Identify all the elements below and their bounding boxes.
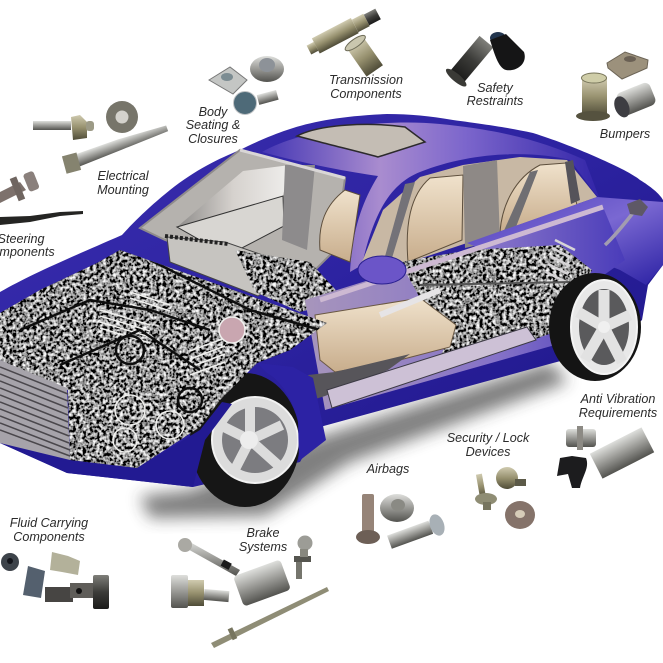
engine bay bbox=[0, 245, 330, 470]
icon: body seating fasteners bbox=[209, 56, 284, 114]
icon: safety restraint fasteners bbox=[444, 32, 525, 89]
label: Bumpers: Bumpers bbox=[600, 127, 651, 141]
front wheel bbox=[190, 373, 300, 507]
label: Electrical Mounting: Mounting bbox=[97, 183, 149, 197]
label: Electrical Mounting: Electrical bbox=[97, 169, 149, 183]
label: Body Seating and Closures: Closures bbox=[188, 132, 239, 146]
label: Body Seating and Closures: Seating & bbox=[186, 118, 240, 132]
car body bbox=[0, 114, 663, 487]
label: Safety Restraints: Safety bbox=[477, 81, 513, 95]
icon: transmission fasteners bbox=[305, 6, 385, 78]
front seat cushion bbox=[315, 298, 456, 372]
label: Safety Restraints: Restraints bbox=[467, 94, 524, 108]
radiator bbox=[0, 360, 70, 460]
shadow under car bbox=[140, 362, 568, 518]
label: Brake Systems: Brake bbox=[247, 526, 279, 540]
label: Airbags: Airbags bbox=[366, 462, 410, 476]
windshield and front door view bbox=[140, 150, 350, 315]
sunroof bbox=[297, 124, 425, 157]
roof panel bbox=[262, 122, 600, 272]
label: Security Lock Devices: Devices bbox=[466, 445, 511, 459]
icon: steering fasteners bbox=[0, 170, 83, 225]
icon: anti vibration fasteners bbox=[557, 426, 654, 488]
mechanical parts under cabin bbox=[402, 245, 592, 354]
label: Anti Vibration Requirements: Requirements bbox=[579, 406, 658, 420]
icon: bumper fasteners bbox=[576, 52, 658, 121]
car bbox=[0, 114, 663, 507]
label: Transmission Components: Components bbox=[330, 87, 402, 101]
front bumper bbox=[0, 402, 232, 487]
icon: airbag fasteners bbox=[356, 494, 447, 549]
label: Anti Vibration Requirements: Anti Vibration bbox=[581, 392, 655, 406]
label: Brake Systems: Systems bbox=[239, 540, 288, 554]
icon: electrical fasteners bbox=[33, 101, 169, 174]
rear windows and seats bbox=[320, 157, 597, 272]
sill bbox=[327, 327, 536, 408]
engine details bbox=[100, 292, 245, 452]
wing mirror bbox=[358, 256, 406, 284]
exhaust bbox=[605, 199, 648, 245]
rear wheel bbox=[549, 273, 641, 381]
belt line bbox=[320, 207, 603, 300]
icon: fluid carrying fasteners bbox=[1, 552, 109, 609]
rear quarter panel bbox=[467, 197, 663, 285]
icon: security lock fasteners bbox=[475, 467, 535, 529]
label: Fluid Carrying Components: Components bbox=[13, 530, 85, 544]
label: Body Seating and Closures: Body bbox=[199, 105, 227, 119]
front fender bbox=[257, 363, 326, 461]
door lower panel bbox=[305, 207, 625, 410]
label: Security Lock Devices: Security / Lock bbox=[447, 431, 529, 445]
cabin floor bbox=[308, 354, 410, 400]
label: Transmission Components: Transmission bbox=[329, 73, 403, 87]
icon: brake fasteners bbox=[171, 536, 329, 648]
label: Fluid Carrying Components: Fluid Carrying bbox=[10, 516, 88, 530]
rear suspension bbox=[380, 240, 575, 315]
